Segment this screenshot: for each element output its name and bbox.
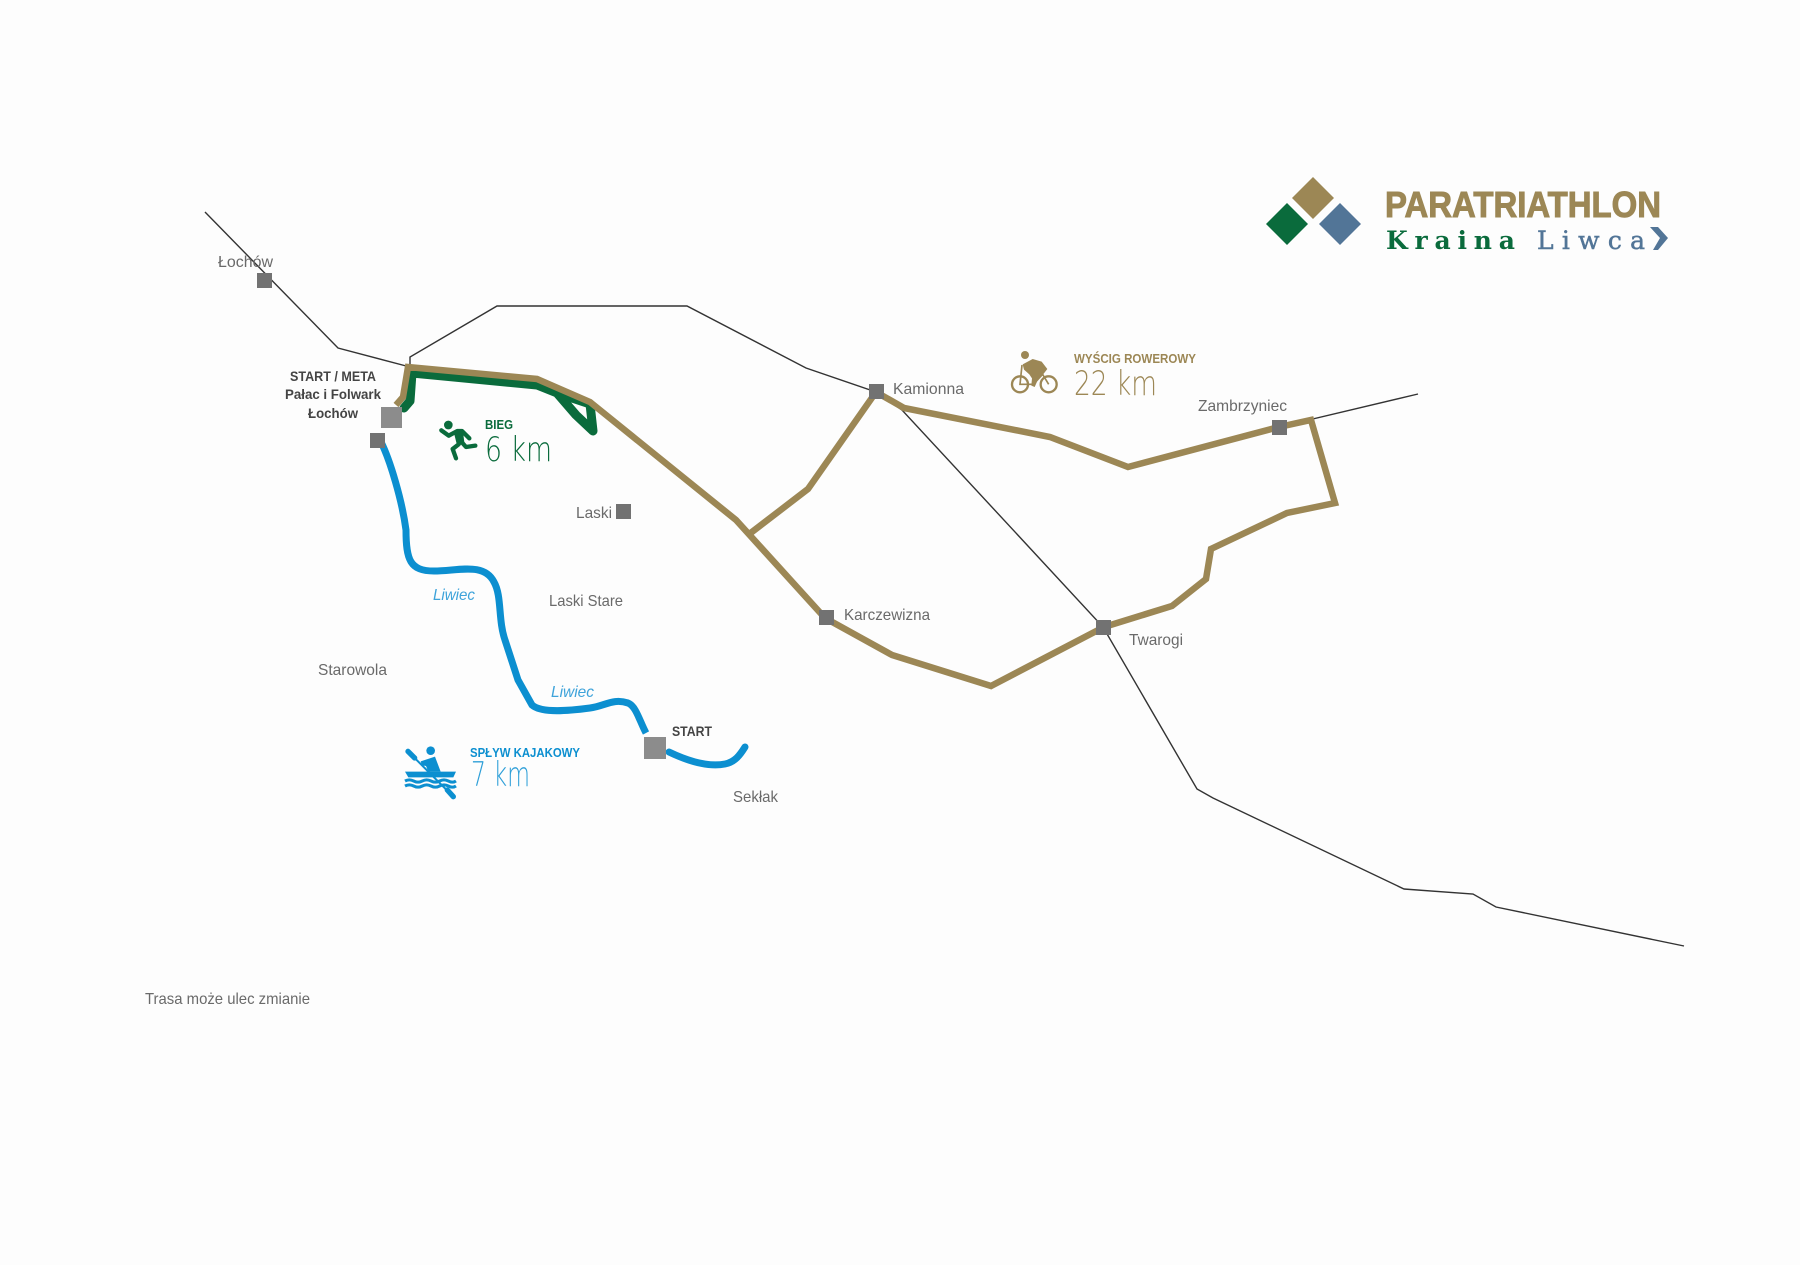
logo chevron (1650, 227, 1668, 250)
bike label: 22 km (1074, 364, 1157, 404)
icon: runner (441, 421, 475, 458)
place labels: Łochów (218, 254, 273, 271)
bike label: WYŚCIG ROWEROWY (1074, 351, 1197, 366)
kayak label (470, 746, 581, 795)
logo subtitle: Kraina (1386, 226, 1515, 255)
place labels: Kamionna (893, 381, 964, 398)
logo diamonds (1266, 177, 1361, 245)
place labels: Laski Stare (549, 593, 623, 610)
kayak route (381, 442, 745, 765)
note: Trasa może ulec zmianie (145, 991, 310, 1008)
logo subtitle (1386, 226, 1645, 255)
place labels: Starowola (318, 662, 387, 679)
place labels: Zambrzyniec (1198, 398, 1287, 415)
kayak label: SPŁYW KAJAKOWY (470, 746, 581, 760)
icon: cyclist (1012, 351, 1057, 392)
logo title: PARATRIATHLON (1385, 184, 1661, 225)
place labels: Twarogi (1129, 632, 1183, 649)
run label: BIEG (485, 418, 513, 432)
start and finish labels (285, 368, 712, 739)
logo (1266, 177, 1668, 255)
place labels (218, 254, 1287, 806)
logo subtitle: Liwca (1537, 226, 1645, 255)
place labels: Laski (576, 505, 612, 522)
start and finish labels: Łochów (308, 405, 358, 421)
road lines (205, 212, 1684, 946)
icon: kayak (405, 746, 456, 797)
run label (485, 418, 552, 470)
start and finish labels: Pałac i Folwark (285, 386, 381, 402)
river labels (433, 587, 594, 701)
place labels: Sekłak (733, 789, 779, 806)
bike label (1074, 351, 1197, 404)
bike route (396, 367, 1335, 686)
run route (404, 373, 593, 431)
place labels: Karczewizna (844, 607, 930, 624)
kayak label: 7 km (471, 755, 530, 795)
river labels: Liwiec (433, 587, 475, 604)
start and finish labels: START (672, 723, 712, 739)
location markers (257, 273, 1287, 759)
run label: 6 km (485, 430, 552, 470)
river labels: Liwiec (551, 684, 594, 701)
start and finish labels: START / META (290, 368, 376, 384)
